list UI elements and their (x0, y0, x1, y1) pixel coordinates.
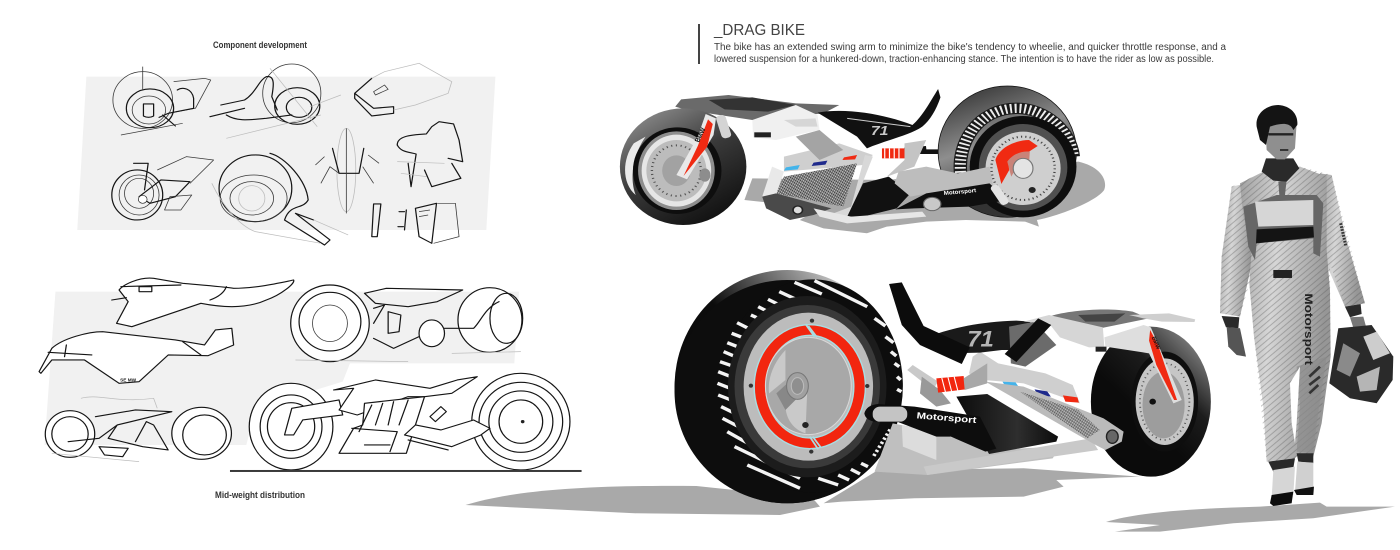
red ring (760, 330, 860, 443)
sketch: seat unit lower: SE MW (120, 378, 137, 383)
badge (754, 132, 771, 137)
engine blocks (969, 352, 1080, 403)
lower light frame (875, 423, 1060, 475)
sketch: front view (315, 128, 379, 213)
head (1256, 105, 1297, 159)
rear tire (938, 86, 1076, 217)
boots (1268, 453, 1314, 506)
sketch: bike lower left (45, 397, 231, 462)
lower crank (762, 193, 831, 220)
sketch: bike lower right (249, 373, 570, 470)
title: _DRAG BIKE (713, 22, 805, 39)
white panel (752, 105, 820, 140)
label motorsport: Motorsport (916, 410, 978, 425)
swing arm light (895, 167, 993, 197)
illustration: large drag bike: BMW (1150, 336, 1161, 351)
description: The bike has an extended swing arm to minimize the bike's tendency to wheelie, and quicker throttle response, and a (714, 42, 1226, 53)
sketch: small parts (372, 203, 459, 243)
engine blocks (784, 143, 873, 172)
leg shading (1297, 357, 1327, 453)
frame top (675, 95, 839, 120)
radiator mesh (776, 163, 857, 207)
suit hatching (1220, 167, 1365, 462)
rear tire (675, 270, 900, 503)
upper grey tail (1051, 310, 1149, 328)
suit lettering: Motorsport (1302, 293, 1314, 365)
shock spring (907, 365, 938, 390)
shadow (1106, 503, 1395, 532)
illustration: small drag bike (620, 86, 1105, 233)
panel: mid-weight sketches (39, 278, 582, 472)
text block: drag bike (698, 22, 1226, 65)
number 71: 71 (871, 124, 888, 139)
illustration: small drag bike: BMW (694, 126, 708, 143)
brake sector red (995, 140, 1038, 184)
panel: component sketches (77, 63, 495, 245)
figure: racing driver (1106, 105, 1395, 532)
stripes on leg (1309, 367, 1320, 393)
rear wheel (970, 116, 1076, 217)
description (714, 42, 1226, 65)
shock spring (882, 148, 904, 158)
helmet (1329, 325, 1393, 403)
tread stripes (960, 108, 1073, 177)
number 71: 71 (967, 327, 994, 351)
neck (1262, 158, 1299, 182)
black under body (956, 394, 1058, 454)
title bar (698, 24, 700, 64)
description: lowered suspension for a hunkered-down, traction-enhancing stance. The intention is to have the rider as low as possible. (714, 54, 1214, 65)
front tire (1091, 327, 1211, 477)
black under body (847, 177, 910, 217)
front disc (1131, 352, 1198, 452)
sketch: tail piece (355, 63, 452, 116)
chest band (1256, 227, 1314, 243)
sketch: big tire and fender (212, 153, 348, 245)
tank (931, 321, 1031, 353)
front fork (1104, 325, 1182, 403)
torso and legs (1240, 167, 1331, 462)
label motorsport: Motorsport (943, 188, 976, 197)
left arm (1220, 183, 1253, 317)
belt badge (1273, 270, 1292, 278)
swing arm (864, 404, 996, 452)
fork with red strip (676, 114, 716, 179)
ground shadow (465, 486, 820, 515)
heading: component development: Component development (213, 40, 307, 50)
sketch: seat unit lower (39, 328, 234, 383)
sketch: seat unit top (112, 278, 294, 327)
sketch: front wheel and arm (112, 157, 214, 220)
caption: mid-weight distribution: Mid-weight distribution (215, 490, 305, 500)
rear hub (728, 296, 887, 477)
black tank and seat (818, 89, 940, 148)
ground shadow (744, 162, 1105, 233)
ground line (230, 470, 582, 472)
front rim (633, 127, 721, 214)
swing arm black (895, 183, 1007, 209)
sketch: rear wheel with arm (113, 67, 211, 135)
inner disc (765, 337, 851, 435)
sketch: seat and tube (397, 122, 463, 187)
chest panel (1243, 195, 1323, 260)
right arm (1320, 173, 1365, 307)
sleeve details (1341, 223, 1346, 247)
sketch background panel (77, 77, 495, 230)
sketch: fender and wheel (210, 64, 341, 138)
tail frame (1009, 322, 1056, 367)
mid-weight background panel (45, 292, 519, 445)
seat (889, 282, 970, 364)
illustration: large drag bike (465, 270, 1211, 515)
front tire (620, 108, 746, 225)
tread stripes (717, 281, 901, 488)
cuffs and hands (1222, 304, 1368, 357)
badge (1096, 347, 1107, 352)
sketch: bike top right (291, 285, 523, 362)
mesh beam (985, 382, 1124, 450)
